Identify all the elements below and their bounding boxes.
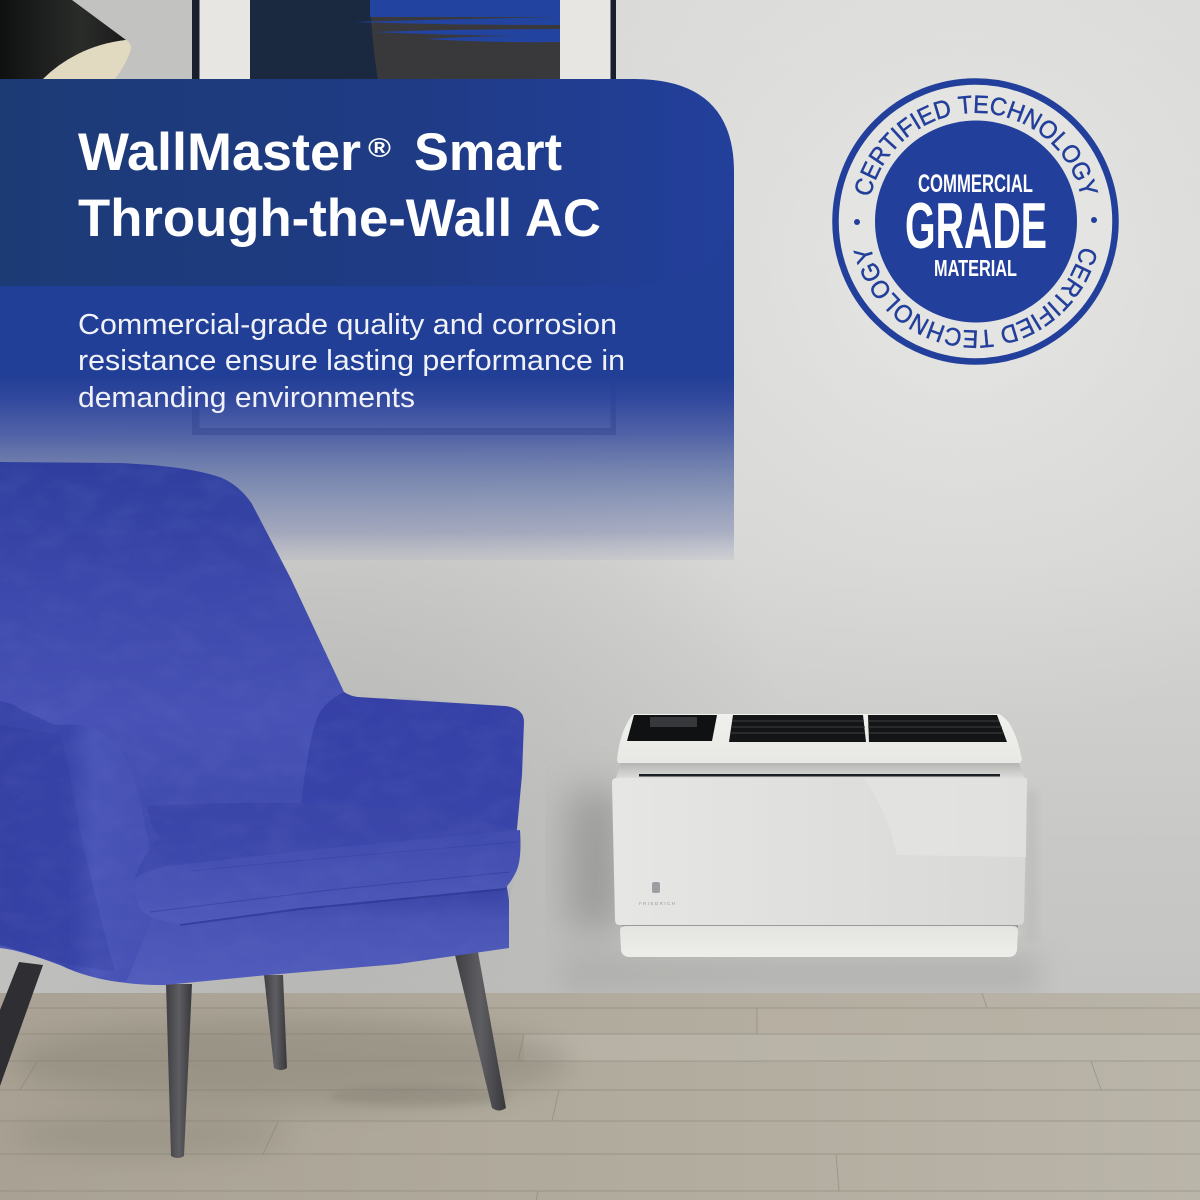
right arm xyxy=(296,692,524,850)
base trim xyxy=(620,926,1018,957)
chair back xyxy=(0,462,400,900)
brand logo xyxy=(639,882,675,906)
badge center text: COMMERCIAL xyxy=(918,170,1033,198)
front panel xyxy=(612,778,1027,925)
description text: Commercial-grade quality and corrosion xyxy=(78,309,617,341)
chair legs xyxy=(0,952,506,1158)
badge center text: GRADE xyxy=(905,189,1047,262)
title: Smart xyxy=(414,123,562,182)
base frame xyxy=(0,875,509,985)
badge ring text: CERTIFIED TECHNOLOGY xyxy=(855,95,1098,195)
air conditioner xyxy=(612,714,1027,957)
seat cushion top xyxy=(134,803,518,890)
floor planks xyxy=(0,993,1200,1200)
description text: resistance ensure lasting performance in xyxy=(78,345,625,377)
left arm xyxy=(0,701,152,982)
vents xyxy=(729,715,1007,742)
badge center text xyxy=(905,170,1047,281)
top unit xyxy=(617,714,1022,763)
title band xyxy=(0,79,734,286)
blue fade panel xyxy=(0,170,734,560)
badge ring text: CERTIFIED TECHNOLOGY xyxy=(853,248,1096,348)
badge: commercial grade material xyxy=(832,78,1119,365)
brand logo: FRIEDRICH xyxy=(639,901,675,906)
seat cushion front xyxy=(134,830,520,924)
description text xyxy=(78,309,625,414)
title xyxy=(78,123,601,248)
badge center text: MATERIAL xyxy=(934,255,1017,281)
description text: demanding environments xyxy=(78,382,415,414)
lamp xyxy=(0,0,131,79)
armchair xyxy=(0,462,524,1158)
title: ® xyxy=(368,133,391,163)
control panel xyxy=(627,715,717,741)
badge ring text xyxy=(853,95,1098,348)
framed picture xyxy=(192,0,616,435)
velvet texture xyxy=(0,462,524,985)
title: Through-the-Wall AC xyxy=(78,189,601,248)
title: WallMaster xyxy=(78,123,361,182)
